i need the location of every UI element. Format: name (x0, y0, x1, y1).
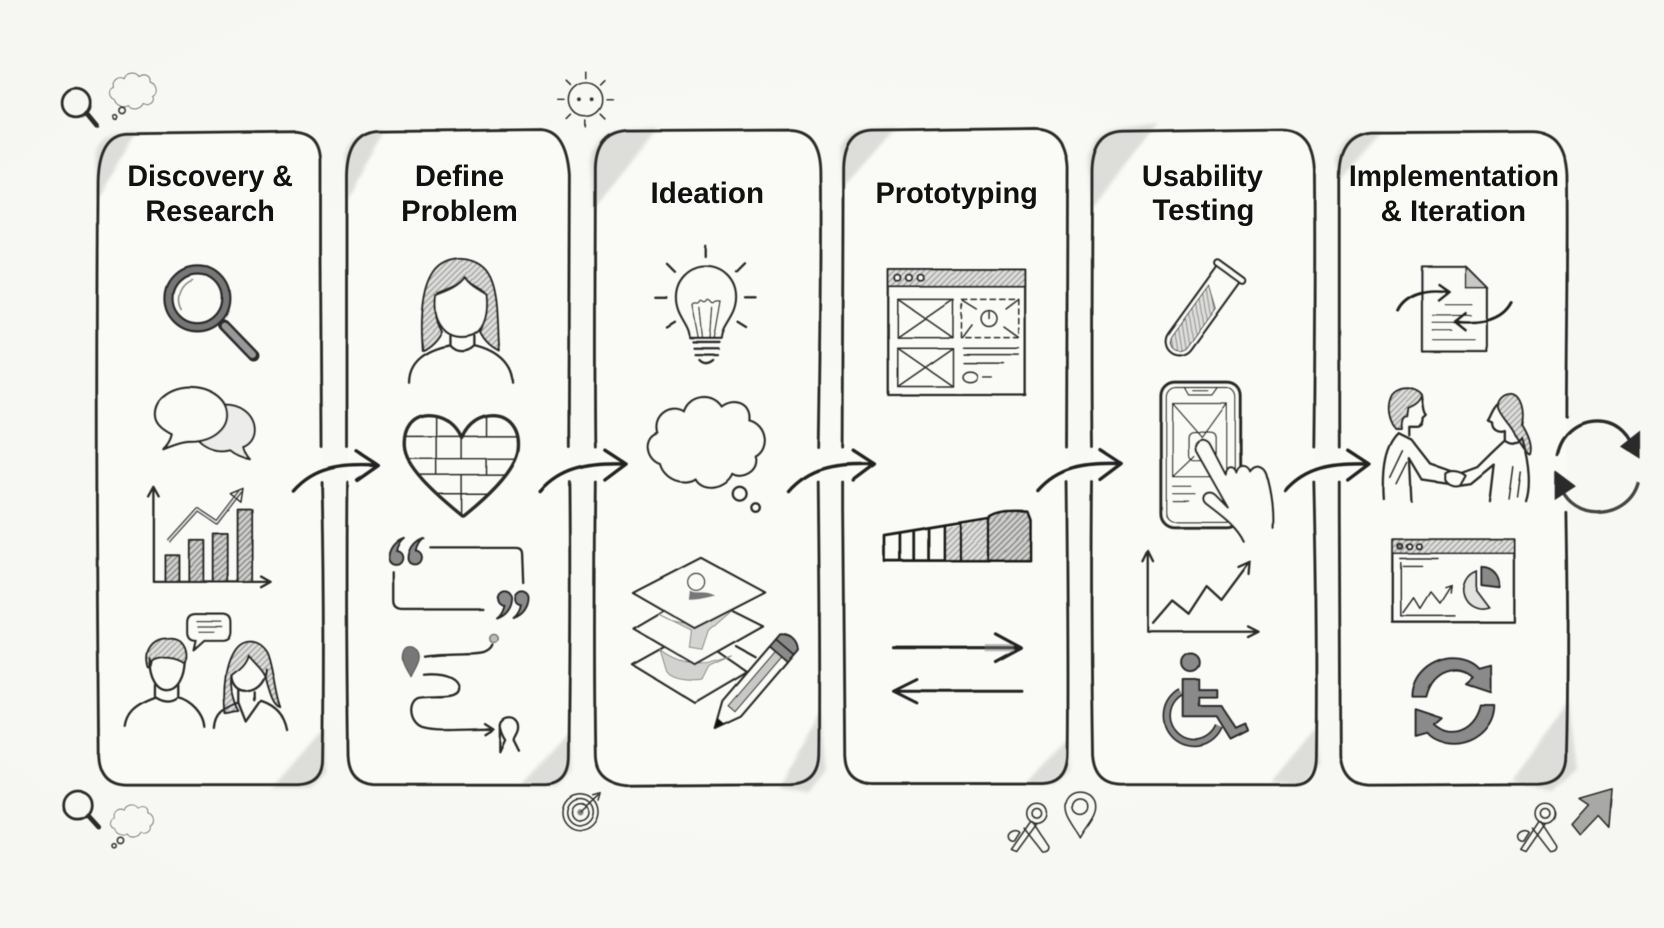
icon: wireframe window (888, 270, 1025, 395)
heading: Ideation (651, 178, 764, 210)
icon: user persona (409, 259, 513, 382)
pencil (706, 630, 801, 736)
icon: test tube (1157, 259, 1246, 363)
chart: rising bars with trend arrow (149, 487, 271, 587)
panel border (347, 130, 570, 785)
arrow: step 1 to 2 (293, 451, 378, 491)
heading: Discovery & (127, 161, 293, 193)
icon: handshake (1383, 388, 1530, 501)
heading: Research (145, 196, 275, 228)
icon: quotation frame (389, 538, 528, 618)
icon: small magnifier bottom left (63, 790, 99, 827)
icon: rising stepped bar (884, 511, 1030, 561)
heading (1142, 161, 1264, 227)
panel: Define Problem (345, 130, 571, 786)
arrow: forward (894, 634, 1021, 661)
heading: Testing (1152, 195, 1254, 227)
icon: chat bubbles (155, 388, 255, 459)
icon: sync arrows (1412, 658, 1494, 743)
heading: Prototyping (876, 178, 1038, 210)
icon: two people talking (125, 614, 288, 731)
icon: sun face (558, 72, 613, 127)
icon: small thought cloud bottom left (110, 804, 153, 848)
arrow: step 4 to 5 (1038, 450, 1122, 491)
icon: user journey path (402, 634, 519, 752)
panel: Ideation (590, 127, 826, 792)
heading: Usability (1142, 161, 1264, 193)
icon: up-right arrow (1572, 789, 1612, 835)
panel border (1092, 130, 1316, 785)
man (125, 638, 205, 727)
arrow: back (894, 680, 1022, 703)
heading (1349, 161, 1559, 228)
icon: stacked layers with pencil (632, 557, 801, 736)
heading: Define (415, 161, 504, 193)
arrow: step 2 to 3 (540, 450, 626, 492)
panel border (97, 132, 323, 785)
icon: tools near implementation (1518, 803, 1557, 852)
icon: brick heart (403, 415, 518, 516)
speech bubble (187, 614, 230, 650)
panel border (1339, 132, 1568, 786)
panel border (595, 130, 821, 786)
panel: Discovery & Research (96, 132, 326, 788)
icon: thought cloud (648, 398, 765, 512)
arrow: step 3 to 4 (788, 450, 874, 492)
woman (1454, 394, 1530, 501)
icon: outer cycle arrows (1555, 420, 1640, 512)
heading: & Iteration (1381, 196, 1526, 228)
icon: light bulb (655, 246, 756, 363)
panel: Prototyping (840, 127, 1070, 784)
layers (632, 557, 765, 703)
icon: wheelchair accessibility (1167, 654, 1248, 743)
icon: target with arrow (562, 793, 601, 830)
panel border (843, 128, 1068, 784)
clasped hands (1445, 471, 1466, 486)
icon: small magnifier top left (62, 89, 97, 125)
arrow: step 5 to 6 (1285, 450, 1369, 491)
icon: tools near prototyping (1008, 803, 1048, 852)
man (1383, 388, 1452, 501)
phone (1161, 382, 1241, 528)
icon: magnifying glass (164, 265, 254, 356)
icon: small thought cloud top left (109, 73, 156, 119)
hand (1194, 439, 1273, 542)
icon: document with swap arrows (1398, 267, 1511, 351)
heading: Implementation (1349, 161, 1559, 193)
icon: analytics dashboard (1392, 539, 1514, 622)
panel: Implementation & Iteration (1335, 132, 1577, 791)
woman (214, 641, 288, 731)
heading (401, 161, 518, 228)
heading (127, 161, 293, 228)
chart: usability trend (1143, 551, 1259, 637)
icon: phone with tapping hand (1161, 382, 1273, 542)
panel: Usability Testing (1088, 123, 1320, 786)
heading: Problem (401, 196, 518, 228)
icon: location pin (1065, 792, 1096, 838)
